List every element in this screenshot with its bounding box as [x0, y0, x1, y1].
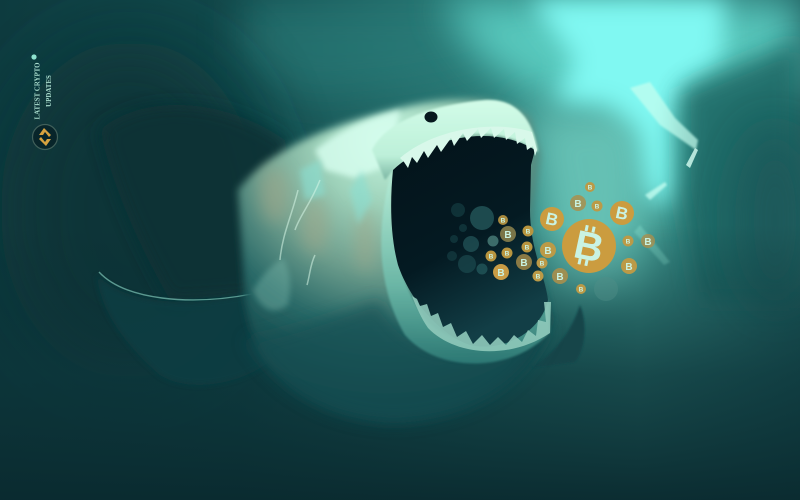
lower fin	[530, 305, 585, 368]
small coins: B	[626, 238, 631, 246]
small coins: B	[526, 228, 531, 236]
bright back	[315, 110, 400, 178]
small coins: B	[579, 286, 584, 294]
small coins: B	[588, 184, 593, 192]
small coins: B	[540, 260, 545, 268]
lower body shading	[245, 300, 552, 423]
medium coins: B	[504, 230, 512, 241]
brand text	[34, 62, 53, 120]
small coins: B	[489, 254, 494, 260]
small coins: B	[525, 244, 530, 252]
small coins: B	[505, 250, 510, 258]
brand text: UPDATES	[46, 75, 53, 107]
tail edge highlight	[99, 272, 252, 300]
main bitcoin coin: B	[570, 222, 607, 272]
status dot	[31, 54, 37, 60]
medium coins: B	[544, 246, 552, 257]
eye	[424, 112, 438, 122]
lip	[381, 170, 550, 364]
faded coins	[447, 203, 618, 301]
small coins	[486, 182, 634, 294]
head top	[372, 100, 538, 180]
large coins: B	[544, 209, 560, 230]
brand text: LATEST CRYPTO	[34, 62, 42, 120]
medium coins: B	[497, 268, 505, 279]
medium coins: B	[644, 237, 652, 248]
medium coins	[493, 195, 655, 284]
main bitcoin coin	[557, 214, 621, 278]
lower teeth	[412, 296, 551, 351]
small coins: B	[595, 204, 600, 210]
medium coins: B	[520, 258, 528, 269]
mouth	[391, 136, 548, 347]
whale	[97, 99, 585, 423]
logo	[32, 124, 58, 150]
medium coins: B	[625, 262, 633, 273]
large coins	[540, 207, 564, 231]
tail fin	[97, 275, 290, 385]
bitcoin coins: B	[614, 203, 630, 224]
body	[238, 99, 552, 423]
bitcoin coins	[447, 182, 655, 301]
small coins: B	[536, 274, 541, 280]
dark dorsal fin	[100, 105, 300, 300]
side fin highlight	[253, 258, 290, 310]
cool highlights	[300, 160, 372, 225]
upper teeth	[400, 127, 537, 168]
brand label	[31, 54, 58, 150]
small coins: B	[501, 218, 506, 224]
warm skin patches	[260, 167, 375, 272]
medium coins: B	[574, 199, 582, 210]
medium coins: B	[556, 272, 564, 283]
body scales	[280, 180, 320, 285]
